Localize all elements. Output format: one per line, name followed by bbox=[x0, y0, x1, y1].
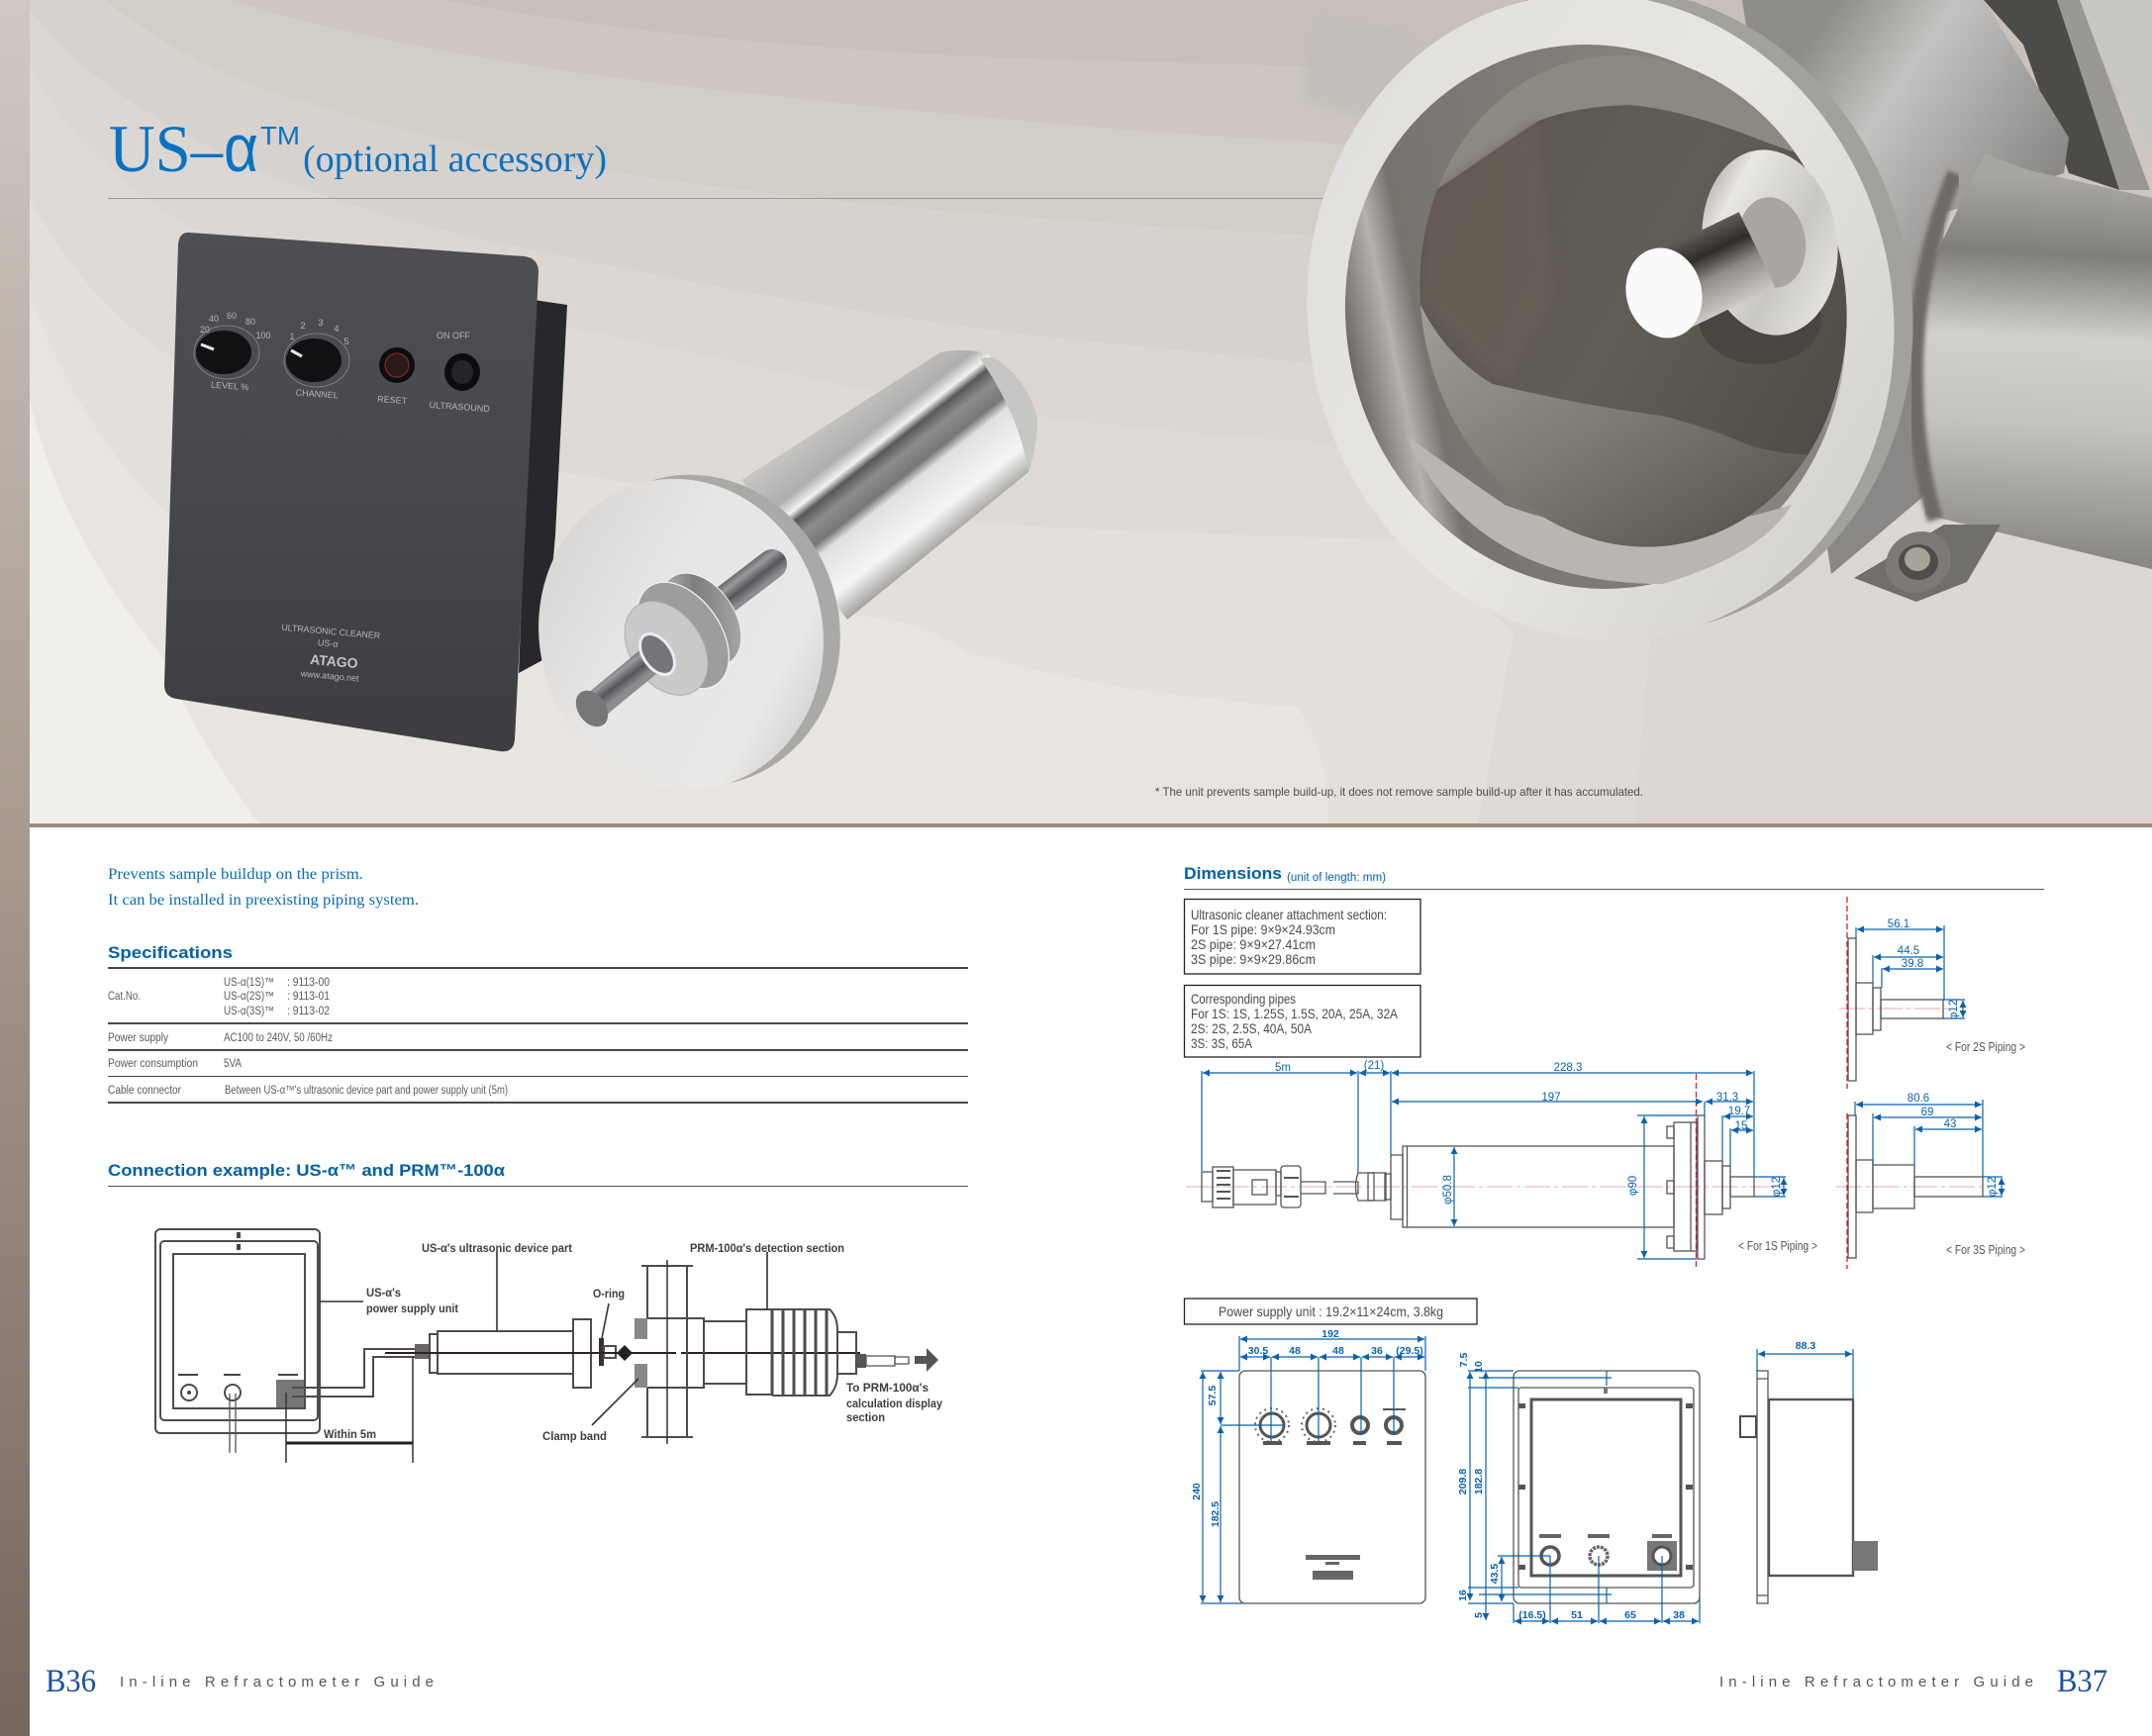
chrome hub bbox=[1691, 141, 1849, 364]
heading: dimensions: (unit of length: mm) bbox=[1287, 872, 1386, 884]
knob: level: LEVEL % bbox=[211, 380, 249, 392]
connection diagram: PRM-100α's detection section bbox=[690, 1241, 844, 1255]
specifications table: Cable connector bbox=[108, 1085, 181, 1097]
connection diagram: US-α's bbox=[366, 1286, 401, 1300]
1S piping side drawing: 31.3 bbox=[1716, 1092, 1738, 1104]
dimension arrows bbox=[1203, 1073, 1784, 1258]
power unit rear drawing: 43.5 bbox=[1489, 1564, 1501, 1584]
connection diagram: power supply unit bbox=[366, 1302, 458, 1315]
specifications table: AC100 to 240V, 50 /60Hz bbox=[224, 1032, 333, 1044]
probe tip bbox=[1615, 240, 1712, 346]
photo: ultrasonic cleaner power supply unit bbox=[164, 233, 1037, 820]
extension lines bbox=[1202, 1071, 1786, 1259]
connection diagram: calculation display bbox=[846, 1397, 942, 1410]
specifications table: Cat.No. bbox=[108, 991, 141, 1003]
datum line bbox=[1695, 1074, 1697, 1269]
specifications table: : 9113-02 bbox=[287, 1006, 330, 1017]
dimensions rule bbox=[1184, 889, 2044, 890]
footer right: B37 bbox=[2057, 1664, 2107, 1699]
power unit front drawing: 192 bbox=[1321, 1328, 1339, 1340]
footer right bbox=[1719, 1664, 2107, 1699]
footer left: In-line Refractometer Guide bbox=[120, 1674, 434, 1690]
spec box: power supply unit bbox=[1184, 1299, 1477, 1324]
spec box: corresponding pipes: 2S: 2S, 2.5S, 40A, 50A bbox=[1191, 1020, 1313, 1036]
ultrasonic device part bbox=[415, 1319, 616, 1388]
pipe opening bbox=[1419, 55, 1847, 546]
panel product label bbox=[281, 623, 381, 684]
specifications table: US-α(2S)™ bbox=[224, 991, 274, 1003]
knob: level: 60 bbox=[227, 311, 237, 321]
1S piping side drawing: 15 bbox=[1735, 1120, 1747, 1132]
knob: channel: 1 bbox=[289, 332, 295, 341]
detection point bbox=[617, 1345, 633, 1361]
footer left: B36 bbox=[46, 1664, 96, 1699]
1S piping side drawing: φ90 bbox=[1627, 1176, 1639, 1196]
main horizontal pipe bbox=[1915, 153, 2152, 569]
title rule bbox=[108, 198, 1335, 199]
caption: < For 1S Piping > bbox=[1738, 1239, 1817, 1253]
panel product label: ULTRASONIC CLEANER bbox=[281, 623, 381, 640]
power unit front drawing: 30.5 bbox=[1248, 1345, 1268, 1357]
power unit front drawing bbox=[1191, 1328, 1425, 1603]
title: TM bbox=[260, 121, 300, 150]
title: (optional accessory) bbox=[303, 139, 607, 180]
power unit front drawing: 36 bbox=[1371, 1345, 1383, 1357]
specifications table: Between US-α™'s ultrasonic device part and power supply unit (5m) bbox=[225, 1085, 508, 1097]
knob: channel: 3 bbox=[318, 318, 324, 328]
clamp ring rim bbox=[1266, 0, 1973, 689]
spec box: attachment section bbox=[1184, 899, 1420, 974]
3S piping side drawing: 43 bbox=[1944, 1118, 1956, 1130]
intro text: It can be installed in preexisting piping system. bbox=[108, 892, 419, 909]
specifications table: Power supply bbox=[108, 1032, 168, 1044]
knob: level: 40 bbox=[209, 314, 219, 324]
3S piping side drawing: φ12 bbox=[1987, 1177, 1999, 1197]
probe shaft bbox=[1667, 249, 1757, 293]
knob: channel: CHANNEL bbox=[295, 388, 339, 400]
header background with fan bands bbox=[30, 0, 2152, 823]
connection diagram: To PRM-100α's bbox=[846, 1381, 929, 1395]
power unit rear drawing: 209.8 bbox=[1457, 1469, 1469, 1495]
panel product label: www.atago.net bbox=[299, 668, 360, 684]
connection heading rule bbox=[108, 1186, 968, 1187]
3S piping side drawing bbox=[1836, 1093, 2025, 1269]
rear left pipe bbox=[1302, 10, 1425, 121]
connection diagram bbox=[155, 1229, 942, 1463]
rear dimensions bbox=[1468, 1371, 1700, 1623]
power unit rear drawing: (16.5) bbox=[1518, 1609, 1546, 1621]
specifications table: Power consumption bbox=[108, 1058, 198, 1070]
panel product label: ATAGO bbox=[310, 651, 358, 671]
knob: channel: 4 bbox=[334, 324, 340, 334]
rear connectors bbox=[1518, 1388, 1693, 1571]
heading: dimensions bbox=[1184, 864, 1386, 884]
1S piping side drawing: 19.7 bbox=[1728, 1106, 1750, 1117]
power unit rear drawing: 10 bbox=[1473, 1361, 1485, 1373]
2S piping side drawing: 56.1 bbox=[1888, 918, 1909, 930]
clamp ring face bbox=[1247, 0, 1954, 695]
front controls bbox=[1255, 1408, 1406, 1580]
specifications table: : 9113-00 bbox=[287, 977, 330, 989]
heading: specifications: Specifications bbox=[108, 943, 233, 962]
specifications table bbox=[108, 967, 968, 1104]
left edge strip bbox=[0, 0, 30, 1736]
lower bowl bbox=[1420, 305, 1808, 546]
specifications table: US-α(1S)™ bbox=[224, 977, 274, 989]
button: ultrasound: ULTRASOUND bbox=[429, 400, 491, 414]
flange disc bbox=[506, 444, 873, 820]
power unit rear drawing: 51 bbox=[1571, 1609, 1583, 1621]
upper right background bbox=[2069, 0, 2152, 153]
specifications table: US-α(3S)™ bbox=[224, 1006, 274, 1017]
front dimensions bbox=[1201, 1336, 1425, 1603]
connection diagram: Clamp band bbox=[542, 1429, 607, 1443]
specifications table: 5VA bbox=[224, 1058, 242, 1070]
front panel bbox=[164, 233, 538, 751]
1S piping side drawing: 228.3 bbox=[1554, 1062, 1582, 1074]
1S piping side drawing bbox=[1186, 1060, 1817, 1269]
knob: level: 100 bbox=[255, 331, 271, 340]
3S piping side drawing: < For 3S Piping > bbox=[1946, 1243, 2025, 1257]
knob: channel bbox=[284, 318, 349, 400]
heading: dimensions: Dimensions bbox=[1184, 864, 1282, 883]
1S piping side drawing: (21) bbox=[1364, 1060, 1384, 1072]
body, flange and shaft bbox=[1391, 1115, 1754, 1259]
power unit front drawing: (29.5) bbox=[1396, 1345, 1423, 1357]
footer right: In-line Refractometer Guide bbox=[1719, 1674, 2033, 1690]
2S piping side drawing: 44.5 bbox=[1898, 945, 1919, 957]
spec box: attachment section: Ultrasonic cleaner attachment section: bbox=[1191, 907, 1387, 922]
power unit rear drawing: 182.8 bbox=[1473, 1469, 1485, 1495]
knob: level bbox=[194, 311, 271, 392]
2S piping side drawing: 39.8 bbox=[1902, 958, 1923, 970]
intro text: Prevents sample buildup on the prism. bbox=[108, 866, 363, 883]
power unit front drawing: 57.5 bbox=[1207, 1386, 1219, 1405]
intro text bbox=[108, 866, 419, 909]
1S piping side drawing: φ50.8 bbox=[1442, 1175, 1454, 1205]
title: α bbox=[224, 111, 258, 186]
spec box: attachment section: For 1S pipe: 9×9×24.93cm bbox=[1191, 921, 1335, 937]
spec box: corresponding pipes: For 1S: 1S, 1.25S, 1.5S, 20A, 25A, 32A bbox=[1191, 1006, 1399, 1021]
panel product label: US-α bbox=[318, 637, 339, 649]
footnote: * The unit prevents sample build-up, it does not remove sample build-up after it has accumulated. bbox=[1155, 785, 1643, 799]
header bottom band bbox=[30, 823, 2152, 827]
power unit rear drawing: 5 bbox=[1473, 1612, 1485, 1618]
power unit side drawing bbox=[1740, 1340, 1878, 1603]
2S piping side drawing: < For 2S Piping > bbox=[1946, 1040, 2025, 1054]
rear box of power unit bbox=[519, 300, 567, 673]
button: reset: RESET bbox=[377, 394, 408, 406]
title bbox=[109, 111, 607, 186]
within 5m dimension bbox=[286, 1357, 413, 1463]
connector and cable bbox=[1202, 1166, 1391, 1207]
3S piping side drawing: 69 bbox=[1921, 1107, 1933, 1118]
specifications table: : 9113-01 bbox=[287, 991, 330, 1003]
ring step bbox=[1295, 0, 1897, 635]
diagram labels: US-α's ultrasonic device part bbox=[422, 1241, 572, 1255]
power unit front drawing: 48 bbox=[1332, 1345, 1344, 1357]
rod and hub bbox=[569, 558, 772, 732]
pipe body bbox=[1742, 0, 2069, 574]
process pipe bbox=[635, 1260, 693, 1444]
power unit front drawing: 48 bbox=[1289, 1345, 1301, 1357]
power unit rear drawing: 65 bbox=[1624, 1609, 1636, 1621]
connection diagram: O-ring bbox=[593, 1287, 625, 1301]
power unit rear drawing: 16 bbox=[1457, 1590, 1469, 1601]
footer left bbox=[46, 1664, 434, 1699]
title: US– bbox=[109, 111, 224, 186]
connection diagram: section bbox=[846, 1410, 885, 1424]
leader lines bbox=[320, 1252, 767, 1425]
spec box: corresponding pipes: 3S: 3S, 65A bbox=[1191, 1035, 1253, 1051]
spec box: corresponding pipes bbox=[1184, 986, 1420, 1057]
button: ultrasound bbox=[429, 331, 491, 414]
power unit front drawing: 182.5 bbox=[1210, 1501, 1222, 1527]
cable to cleaner bbox=[292, 1349, 415, 1397]
1S piping side drawing: 197 bbox=[1541, 1092, 1561, 1104]
power unit rear drawing bbox=[1457, 1353, 1700, 1623]
2S piping side drawing: φ12 bbox=[1948, 1000, 1960, 1019]
center line bbox=[385, 1352, 860, 1354]
power unit front drawing: 240 bbox=[1191, 1483, 1203, 1500]
button: ultrasound: ON OFF bbox=[437, 331, 470, 340]
spec box: corresponding pipes: Corresponding pipes bbox=[1191, 991, 1296, 1007]
output arrow bbox=[915, 1348, 938, 1372]
knob: level: 20 bbox=[200, 325, 210, 335]
power supply unit rear view bbox=[155, 1229, 320, 1453]
rear wall bbox=[1428, 122, 1536, 338]
power unit side drawing: 88.3 bbox=[1796, 1340, 1815, 1352]
upper wedge bbox=[1437, 55, 1796, 189]
center line bbox=[1186, 1186, 1787, 1188]
power unit rear drawing: 7.5 bbox=[1458, 1353, 1470, 1367]
dimension values: 5m bbox=[1275, 1062, 1291, 1074]
cast bracket bbox=[1984, 0, 2119, 190]
knob: channel: 2 bbox=[300, 321, 306, 331]
power unit rear drawing: 38 bbox=[1673, 1609, 1685, 1621]
3S piping side drawing: 80.6 bbox=[1907, 1093, 1929, 1105]
spec box: attachment section: 2S pipe: 9×9×27.41cm bbox=[1191, 936, 1316, 952]
side depth dimension bbox=[1757, 1349, 1853, 1399]
spec box: attachment section: 3S pipe: 9×9×29.86cm bbox=[1191, 951, 1316, 967]
knob: level: 80 bbox=[245, 317, 255, 327]
photo: detection section with cleaner inside pipe bbox=[1307, 0, 2152, 626]
2S piping side drawing bbox=[1839, 897, 2025, 1089]
knob: channel: 5 bbox=[343, 337, 349, 346]
button: reset bbox=[377, 347, 415, 406]
steel cylinder bbox=[741, 350, 1037, 620]
spec box: power supply unit: Power supply unit : 19.2×11×24cm, 3.8kg bbox=[1219, 1303, 1443, 1319]
heading: connection example: Connection example: US-α™ and PRM™-100α bbox=[108, 1161, 506, 1180]
lower bolt bbox=[1854, 520, 2001, 605]
connection diagram: Within 5m bbox=[324, 1427, 376, 1441]
detection section with fins bbox=[687, 1309, 909, 1396]
1S piping side drawing: φ12 bbox=[1771, 1177, 1783, 1197]
weld seam bbox=[1915, 173, 1955, 520]
